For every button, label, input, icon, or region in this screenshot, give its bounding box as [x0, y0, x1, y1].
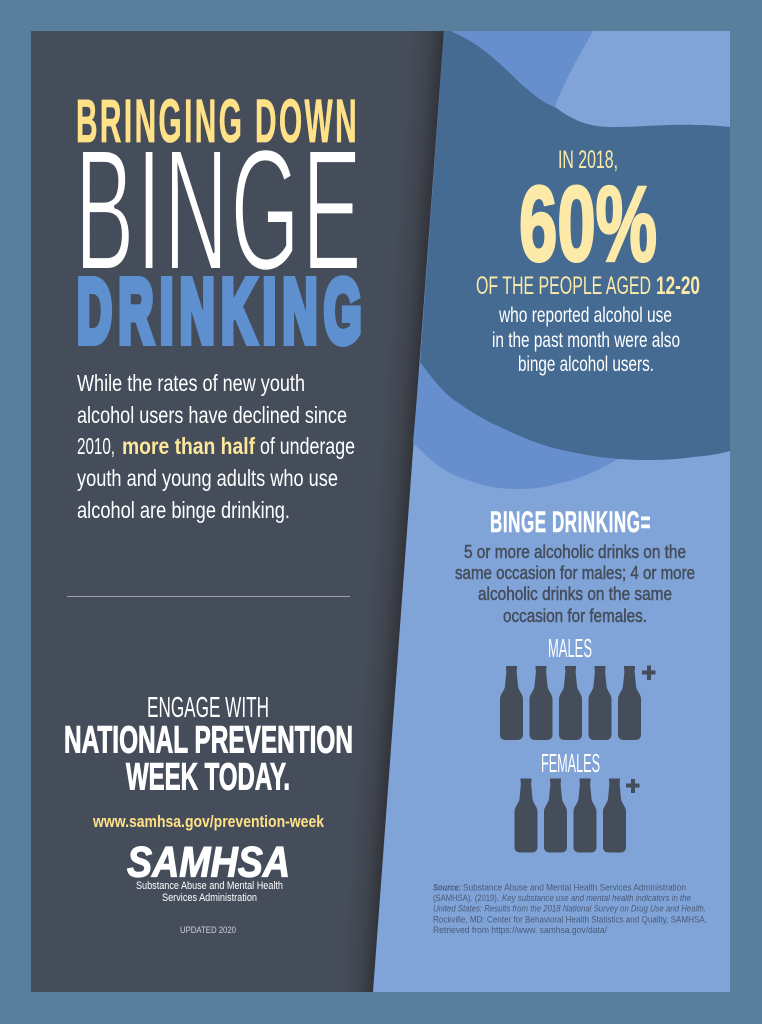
text: BRINGING DOWN	[76, 87, 359, 155]
logo: samhsa	[127, 838, 290, 904]
logo: samhsa: Services Administration	[162, 892, 257, 904]
text block: youth alcohol intro	[77, 370, 355, 523]
source citation: Rockville, MD: Center for Behavioral Health Statistics and Quality, SAMHSA.	[433, 914, 707, 924]
statistic: 60 percent: 60%	[519, 164, 657, 284]
statistic: 60 percent: IN 2018,	[558, 146, 618, 174]
heading: national prevention week: NATIONAL PREVENTION	[64, 720, 353, 762]
source citation: Source:	[433, 882, 461, 892]
statistic: 60 percent: in the past month were also	[492, 329, 680, 352]
source citation: Substance Abuse and Mental Health Services Administration	[463, 882, 686, 892]
wave: bottom mid blue	[413, 362, 618, 489]
panel: left dark	[31, 31, 451, 992]
text block: youth alcohol intro: alcohol are binge drinking.	[77, 497, 290, 523]
link: website: www.samhsa.gov/prevention-week	[92, 812, 324, 831]
text: updated date: UPDATED 2020	[180, 925, 236, 935]
text block: youth alcohol intro: of underage	[260, 433, 355, 459]
text block: definition: alcoholic drinks on the same	[478, 584, 672, 604]
text block: youth alcohol intro: 2010,	[77, 433, 115, 459]
text block: definition	[455, 542, 695, 626]
wave: dark blue statistic area	[420, 31, 730, 460]
text block: youth alcohol intro: alcohol users have declined since	[77, 402, 347, 428]
title: drinking: DRINKING	[77, 262, 368, 362]
statistic: 60 percent: who reported alcohol use	[498, 304, 672, 327]
statistic: 60 percent: 12-20	[656, 272, 700, 300]
logo: samhsa: SAMHSA	[127, 838, 290, 886]
text block: definition: occasion for females.	[503, 606, 647, 626]
heading: national prevention week: WEEK TODAY.	[126, 756, 290, 798]
source citation: United States: Results from the 2018 National Survey on Drug Use and Health.	[433, 904, 706, 914]
text block: definition: 5 or more alcoholic drinks on the	[464, 542, 686, 562]
panel: right blue	[373, 31, 730, 992]
wave: top mid blue	[446, 31, 593, 107]
statistic: 60 percent	[476, 146, 700, 376]
title: binge: BINGE	[75, 112, 364, 306]
heading: national prevention week	[64, 720, 353, 798]
statistic: 60 percent: binge alcohol users.	[518, 353, 654, 376]
icons: four bottles plus	[514, 778, 640, 852]
text block: youth alcohol intro: more than half	[122, 433, 255, 459]
icons: five bottles plus	[500, 666, 656, 740]
text block: definition: same occasion for males; 4 or more	[455, 563, 695, 583]
source citation	[433, 882, 707, 935]
text: MALES	[548, 633, 592, 663]
source citation: Retrieved from https://www. samhsa.gov/data/	[433, 925, 607, 935]
source citation: (SAMHSA). (2019).	[433, 893, 499, 903]
logo: samhsa: Substance Abuse and Mental Health	[136, 880, 283, 892]
text block: youth alcohol intro: youth and young adults who use	[77, 465, 338, 491]
source citation: Key substance use and mental health indicators in the	[502, 893, 691, 903]
text: FEMALES	[541, 748, 600, 778]
statistic: 60 percent: OF THE PEOPLE AGED	[476, 272, 651, 300]
heading: engage with: ENGAGE WITH	[147, 692, 269, 724]
text block: youth alcohol intro: While the rates of new youth	[77, 370, 305, 396]
